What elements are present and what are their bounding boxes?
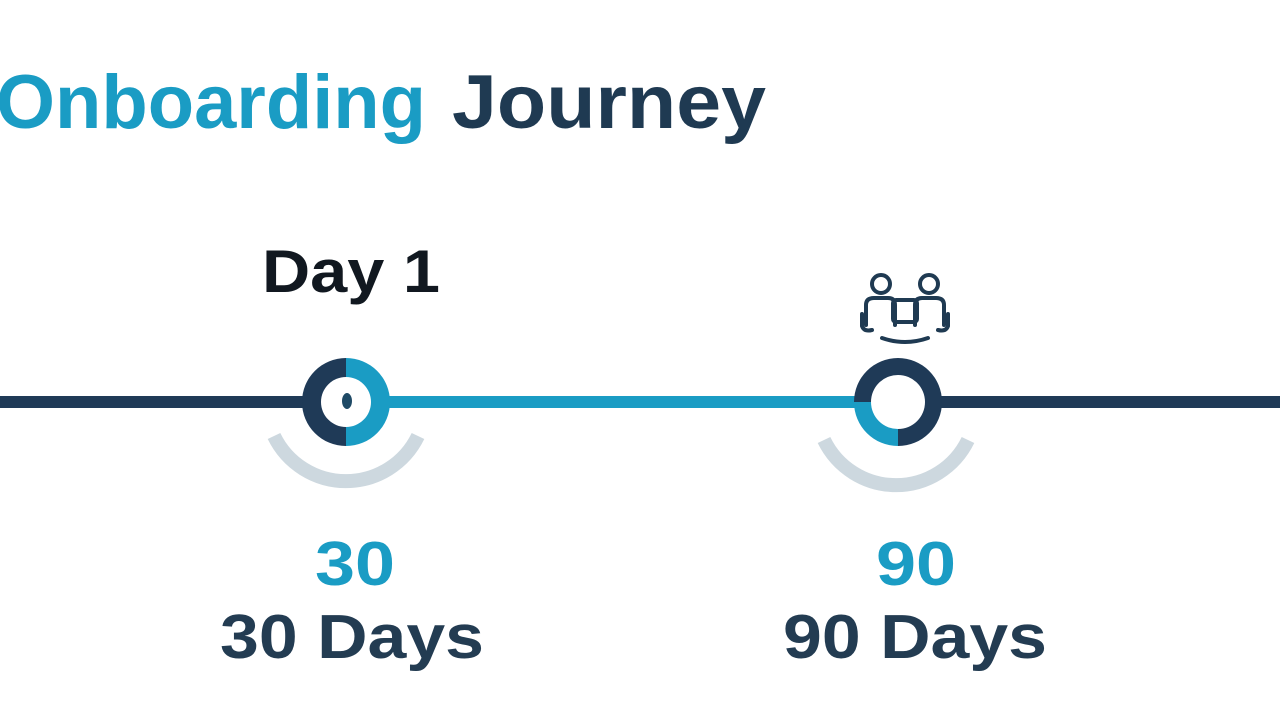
milestone 2 labels: 90: [876, 530, 956, 599]
milestone 1 labels: 30: [315, 530, 395, 599]
icon: team: [862, 275, 948, 342]
arc under milestone 2: [824, 440, 968, 485]
milestone 2 labels: [783, 530, 1047, 672]
title: [0, 60, 766, 145]
milestone 1 labels: [220, 530, 484, 672]
title: Journey: [452, 60, 766, 145]
milestone 1 node: [302, 358, 390, 446]
milestone: Day 1 label: Day 1: [262, 238, 440, 305]
title: Onboarding: [0, 60, 426, 145]
arc under milestone 1: [274, 436, 418, 481]
milestone 2 labels: 90 Days: [783, 603, 1047, 672]
milestone 1 labels: 30 Days: [220, 603, 484, 672]
milestone 2 node: [854, 358, 942, 446]
timeline line: [0, 396, 1280, 408]
